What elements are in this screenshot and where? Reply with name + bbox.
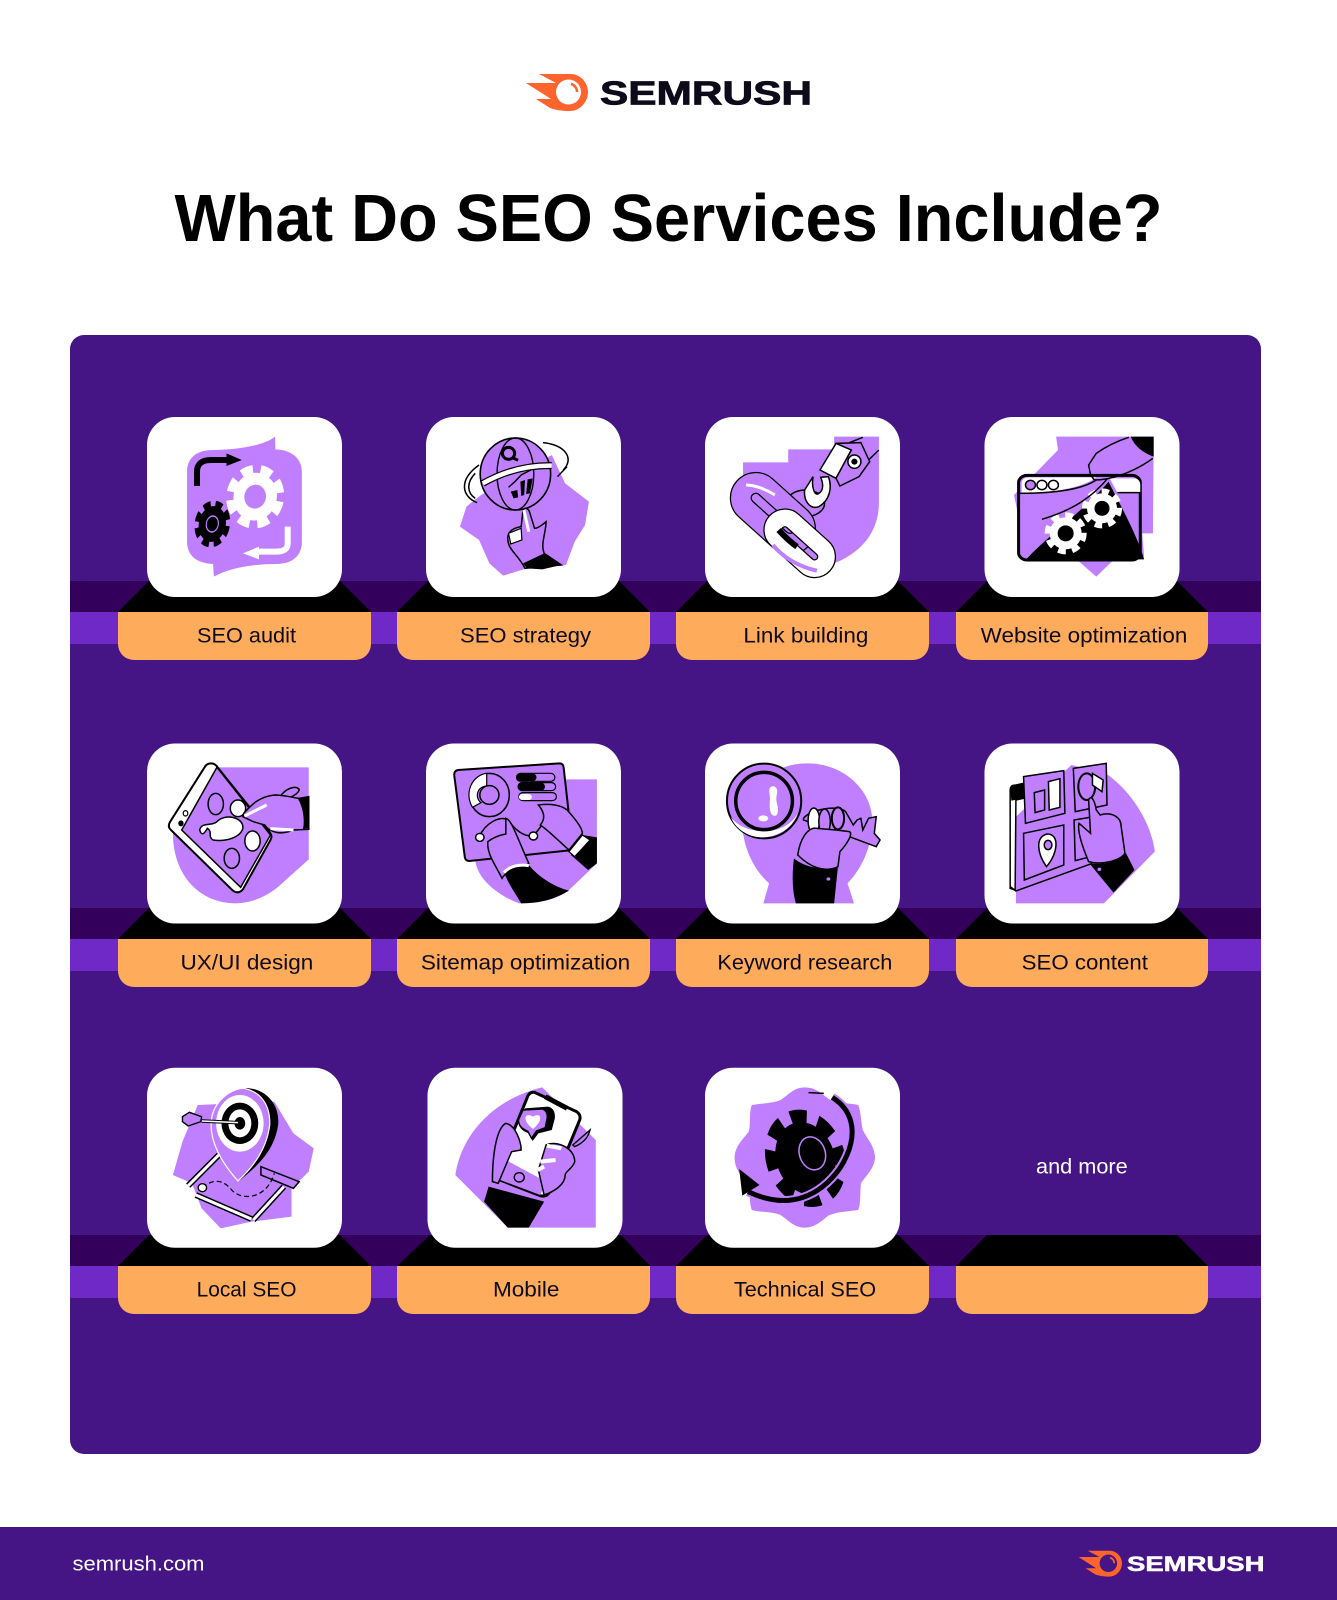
label bar <box>956 939 1208 987</box>
card: SEO content <box>956 744 1208 987</box>
label bar <box>676 939 929 987</box>
panel: services <box>70 335 1261 1454</box>
label: SEO audit <box>197 625 296 648</box>
tile <box>705 417 900 597</box>
footer <box>0 1527 1337 1600</box>
pedestal <box>118 1235 371 1266</box>
label bar <box>956 1266 1208 1314</box>
pedestal <box>676 581 929 612</box>
pedestal <box>397 581 650 612</box>
logo: Semrush header: SEMRUSH <box>600 74 812 111</box>
icon: phone in hand with heart <box>455 1087 596 1228</box>
tile <box>147 1068 342 1248</box>
label: SEO strategy <box>460 625 592 648</box>
tile <box>705 744 900 924</box>
icon: website with gears <box>1014 437 1154 577</box>
footer url: semrush.com <box>72 1554 204 1576</box>
tile <box>705 1068 900 1248</box>
card: Local SEO <box>118 1068 371 1314</box>
tile <box>428 1068 622 1248</box>
label: Sitemap optimization <box>421 952 630 974</box>
pedestal <box>956 1235 1208 1266</box>
tile <box>426 417 621 597</box>
pedestal <box>397 1235 650 1266</box>
icon: magnifier and key <box>727 763 880 903</box>
label bar <box>118 939 371 987</box>
icon: dashboard with two hands <box>454 763 597 903</box>
label: UX/UI design <box>180 952 313 974</box>
card: Keyword research <box>676 744 929 987</box>
label: and more <box>1036 1156 1128 1179</box>
label: Keyword research <box>717 952 892 974</box>
card: Technical SEO <box>676 1068 929 1314</box>
label bar <box>118 1266 371 1314</box>
label bar <box>676 1266 929 1314</box>
tile <box>426 744 621 924</box>
pedestal <box>118 908 371 939</box>
card: SEO strategy <box>397 417 650 660</box>
card: Mobile <box>397 1068 650 1314</box>
label bar <box>676 612 929 660</box>
logo: Semrush footer <box>1079 1551 1264 1577</box>
label: SEO content <box>1022 952 1148 974</box>
icon: globe on finger <box>460 438 589 576</box>
card: and more <box>956 1156 1208 1314</box>
tile <box>147 417 342 597</box>
icon: gear with circular arrow <box>735 1087 875 1228</box>
logo: Semrush footer: SEMRUSH <box>1127 1553 1264 1576</box>
tile <box>147 744 342 924</box>
label bar <box>956 612 1208 660</box>
card: Website optimization <box>956 417 1208 660</box>
label bar <box>118 612 371 660</box>
label: Mobile <box>493 1278 559 1302</box>
card: UX/UI design <box>118 744 371 987</box>
pedestal <box>956 581 1208 612</box>
title: What Do SEO Services Include? <box>174 181 1162 256</box>
label bar <box>397 612 650 660</box>
pedestal <box>118 581 371 612</box>
icon: gears with cycle arrows <box>187 437 302 577</box>
pedestal <box>956 908 1208 939</box>
label bar <box>397 939 650 987</box>
icon: content blocks and hand <box>1010 763 1155 903</box>
tile <box>984 744 1180 924</box>
label: Link building <box>743 625 868 648</box>
icon: chain and hook <box>735 437 879 574</box>
label: Local SEO <box>197 1278 296 1302</box>
card: Link building <box>676 417 929 660</box>
label bar <box>397 1266 650 1314</box>
label: Technical SEO <box>734 1278 876 1302</box>
pedestal <box>397 908 650 939</box>
tile <box>984 417 1180 597</box>
icon: tablet with pointing hand <box>169 763 309 903</box>
pedestal <box>676 908 929 939</box>
pedestal <box>676 1235 929 1266</box>
card: Sitemap optimization <box>397 744 650 987</box>
icon: map pin target with dart <box>173 1088 314 1228</box>
label: Website optimization <box>981 625 1187 648</box>
logo: Semrush header <box>526 74 812 111</box>
card: SEO audit <box>118 417 371 660</box>
